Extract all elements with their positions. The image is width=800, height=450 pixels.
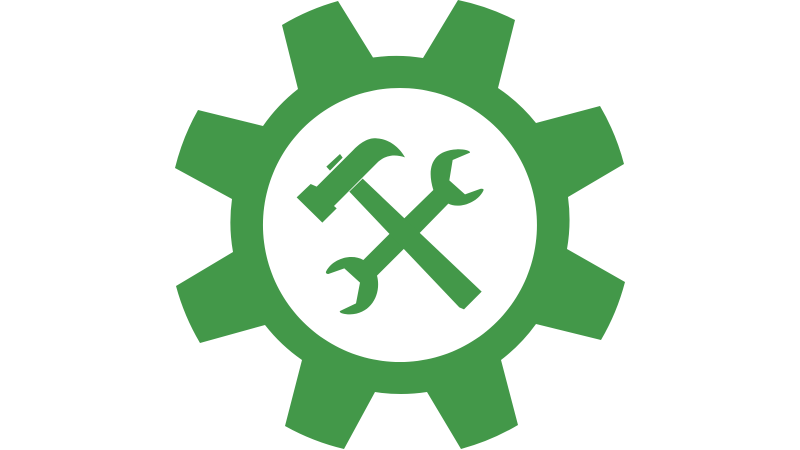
icon: hammer detail bar — [326, 154, 343, 171]
icon: hammer handle — [349, 179, 482, 309]
icon: wrench — [326, 149, 484, 314]
icon: gear — [175, 0, 625, 449]
icon: hammer head — [297, 138, 405, 223]
icon: hammer and wrench — [297, 138, 484, 314]
